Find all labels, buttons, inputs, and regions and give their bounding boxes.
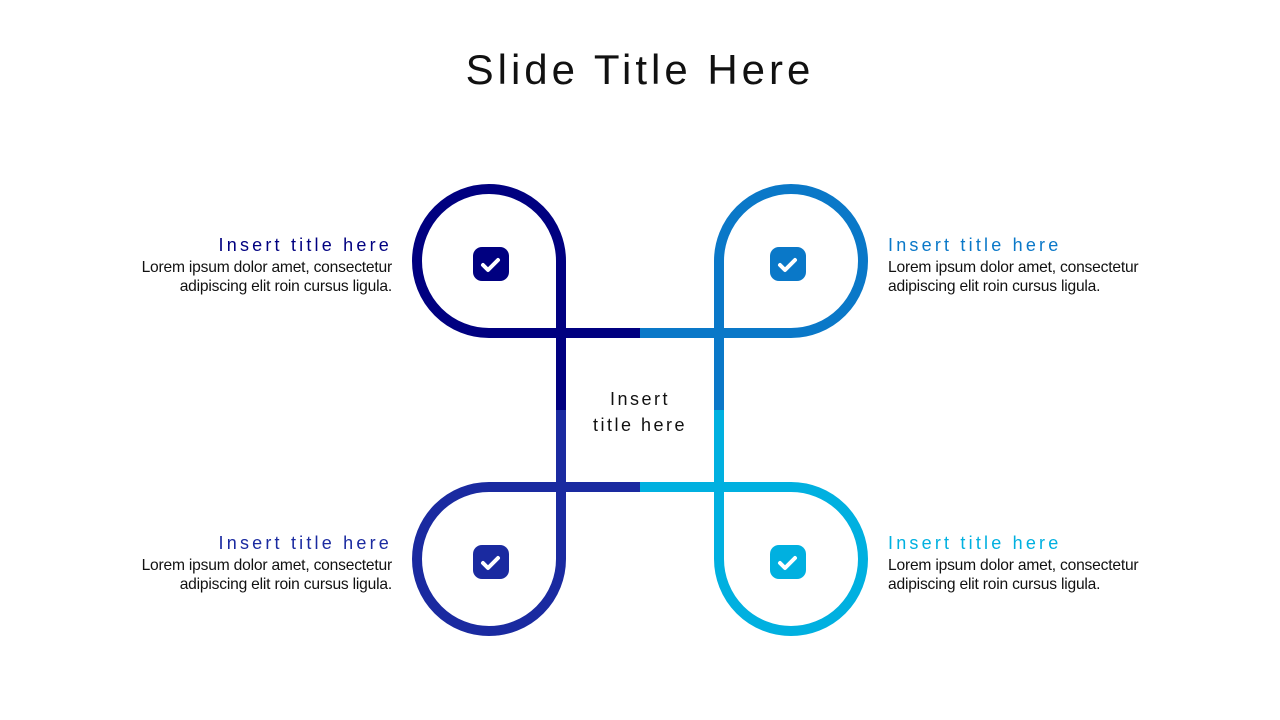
text block: top-left [142, 235, 392, 295]
text block: top-right [888, 235, 1138, 295]
text block: bottom-right: Lorem ipsum dolor amet, consectetur [888, 557, 1138, 574]
text block: top-right: adipiscing elit roin cursus ligula. [888, 278, 1100, 295]
loop: bottom-left [417, 410, 640, 631]
loop: top-right [640, 189, 863, 410]
text block: bottom-left [142, 533, 392, 593]
text block: top-left: adipiscing elit roin cursus ligula. [180, 278, 392, 295]
loop: bottom-right [640, 410, 863, 631]
text block: bottom-left: Insert title here [219, 533, 392, 553]
text block: top-right: Lorem ipsum dolor amet, consectetur [888, 259, 1138, 276]
center label: title here [593, 415, 687, 435]
text block: bottom-left: Lorem ipsum dolor amet, consectetur [142, 557, 392, 574]
text block: top-left: Insert title here [219, 235, 392, 255]
title: Slide Title Here [466, 46, 814, 93]
center label: Insert [610, 389, 670, 409]
text block: bottom-right: adipiscing elit roin cursus ligula. [888, 576, 1100, 593]
loop: top-left [417, 189, 640, 410]
text block: top-right: Insert title here [888, 235, 1061, 255]
text block: bottom-right: Insert title here [888, 533, 1061, 553]
text block: bottom-left: adipiscing elit roin cursus ligula. [180, 576, 392, 593]
text block: top-left: Lorem ipsum dolor amet, consectetur [142, 259, 392, 276]
center label [593, 389, 687, 435]
text block: bottom-right [888, 533, 1138, 593]
